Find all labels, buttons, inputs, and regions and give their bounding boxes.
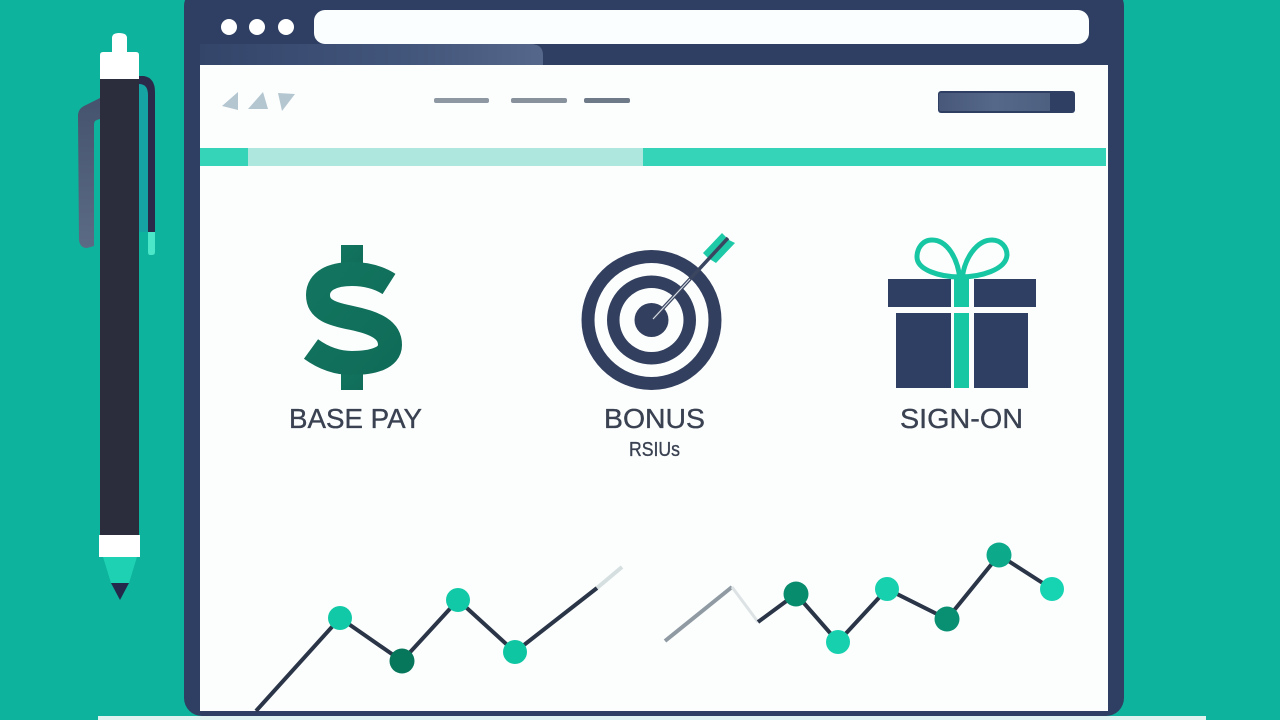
pen button bbox=[112, 33, 127, 53]
icon: gift box bbox=[888, 240, 1036, 388]
icon: dollar sign bbox=[311, 245, 390, 390]
chart faded connector bbox=[597, 567, 758, 641]
bottom base strip bbox=[98, 716, 1206, 720]
gift bow bbox=[917, 240, 1007, 280]
nav triangles bbox=[222, 92, 295, 111]
top bar highlight bbox=[200, 44, 543, 65]
teal banner bbox=[200, 148, 1106, 166]
arrow shaft bbox=[653, 238, 728, 319]
chart nodes bbox=[328, 542, 1064, 674]
label: RSUs: RSIUs bbox=[629, 439, 680, 461]
gift body bbox=[896, 313, 951, 388]
arrow fletching bbox=[703, 233, 735, 263]
pen lower band bbox=[99, 535, 140, 557]
browser frame bbox=[184, 0, 1124, 716]
gift ribbon bbox=[954, 279, 969, 307]
window control dots bbox=[221, 19, 294, 35]
pen barrel bbox=[100, 79, 139, 535]
label: bonus: BONUS bbox=[604, 403, 705, 434]
nav button bbox=[938, 91, 1075, 113]
chart right segment bbox=[758, 555, 1052, 642]
pen right clip bbox=[139, 76, 155, 255]
address bar bbox=[314, 10, 1089, 44]
page content area bbox=[200, 65, 1108, 711]
line chart bbox=[256, 542, 1064, 711]
pen tip bbox=[111, 583, 129, 600]
label: sign-on: SIGN-ON bbox=[900, 403, 1023, 434]
label: base pay: BASE PAY bbox=[289, 403, 422, 434]
gift lid bbox=[888, 279, 951, 307]
pen cone bbox=[103, 557, 137, 583]
pen left clip bbox=[78, 98, 100, 248]
pen cap bbox=[100, 52, 139, 80]
chart left segment bbox=[256, 588, 597, 711]
nav links bbox=[434, 98, 630, 103]
icon: pen bbox=[78, 33, 155, 600]
icon: target with arrow bbox=[582, 233, 735, 390]
